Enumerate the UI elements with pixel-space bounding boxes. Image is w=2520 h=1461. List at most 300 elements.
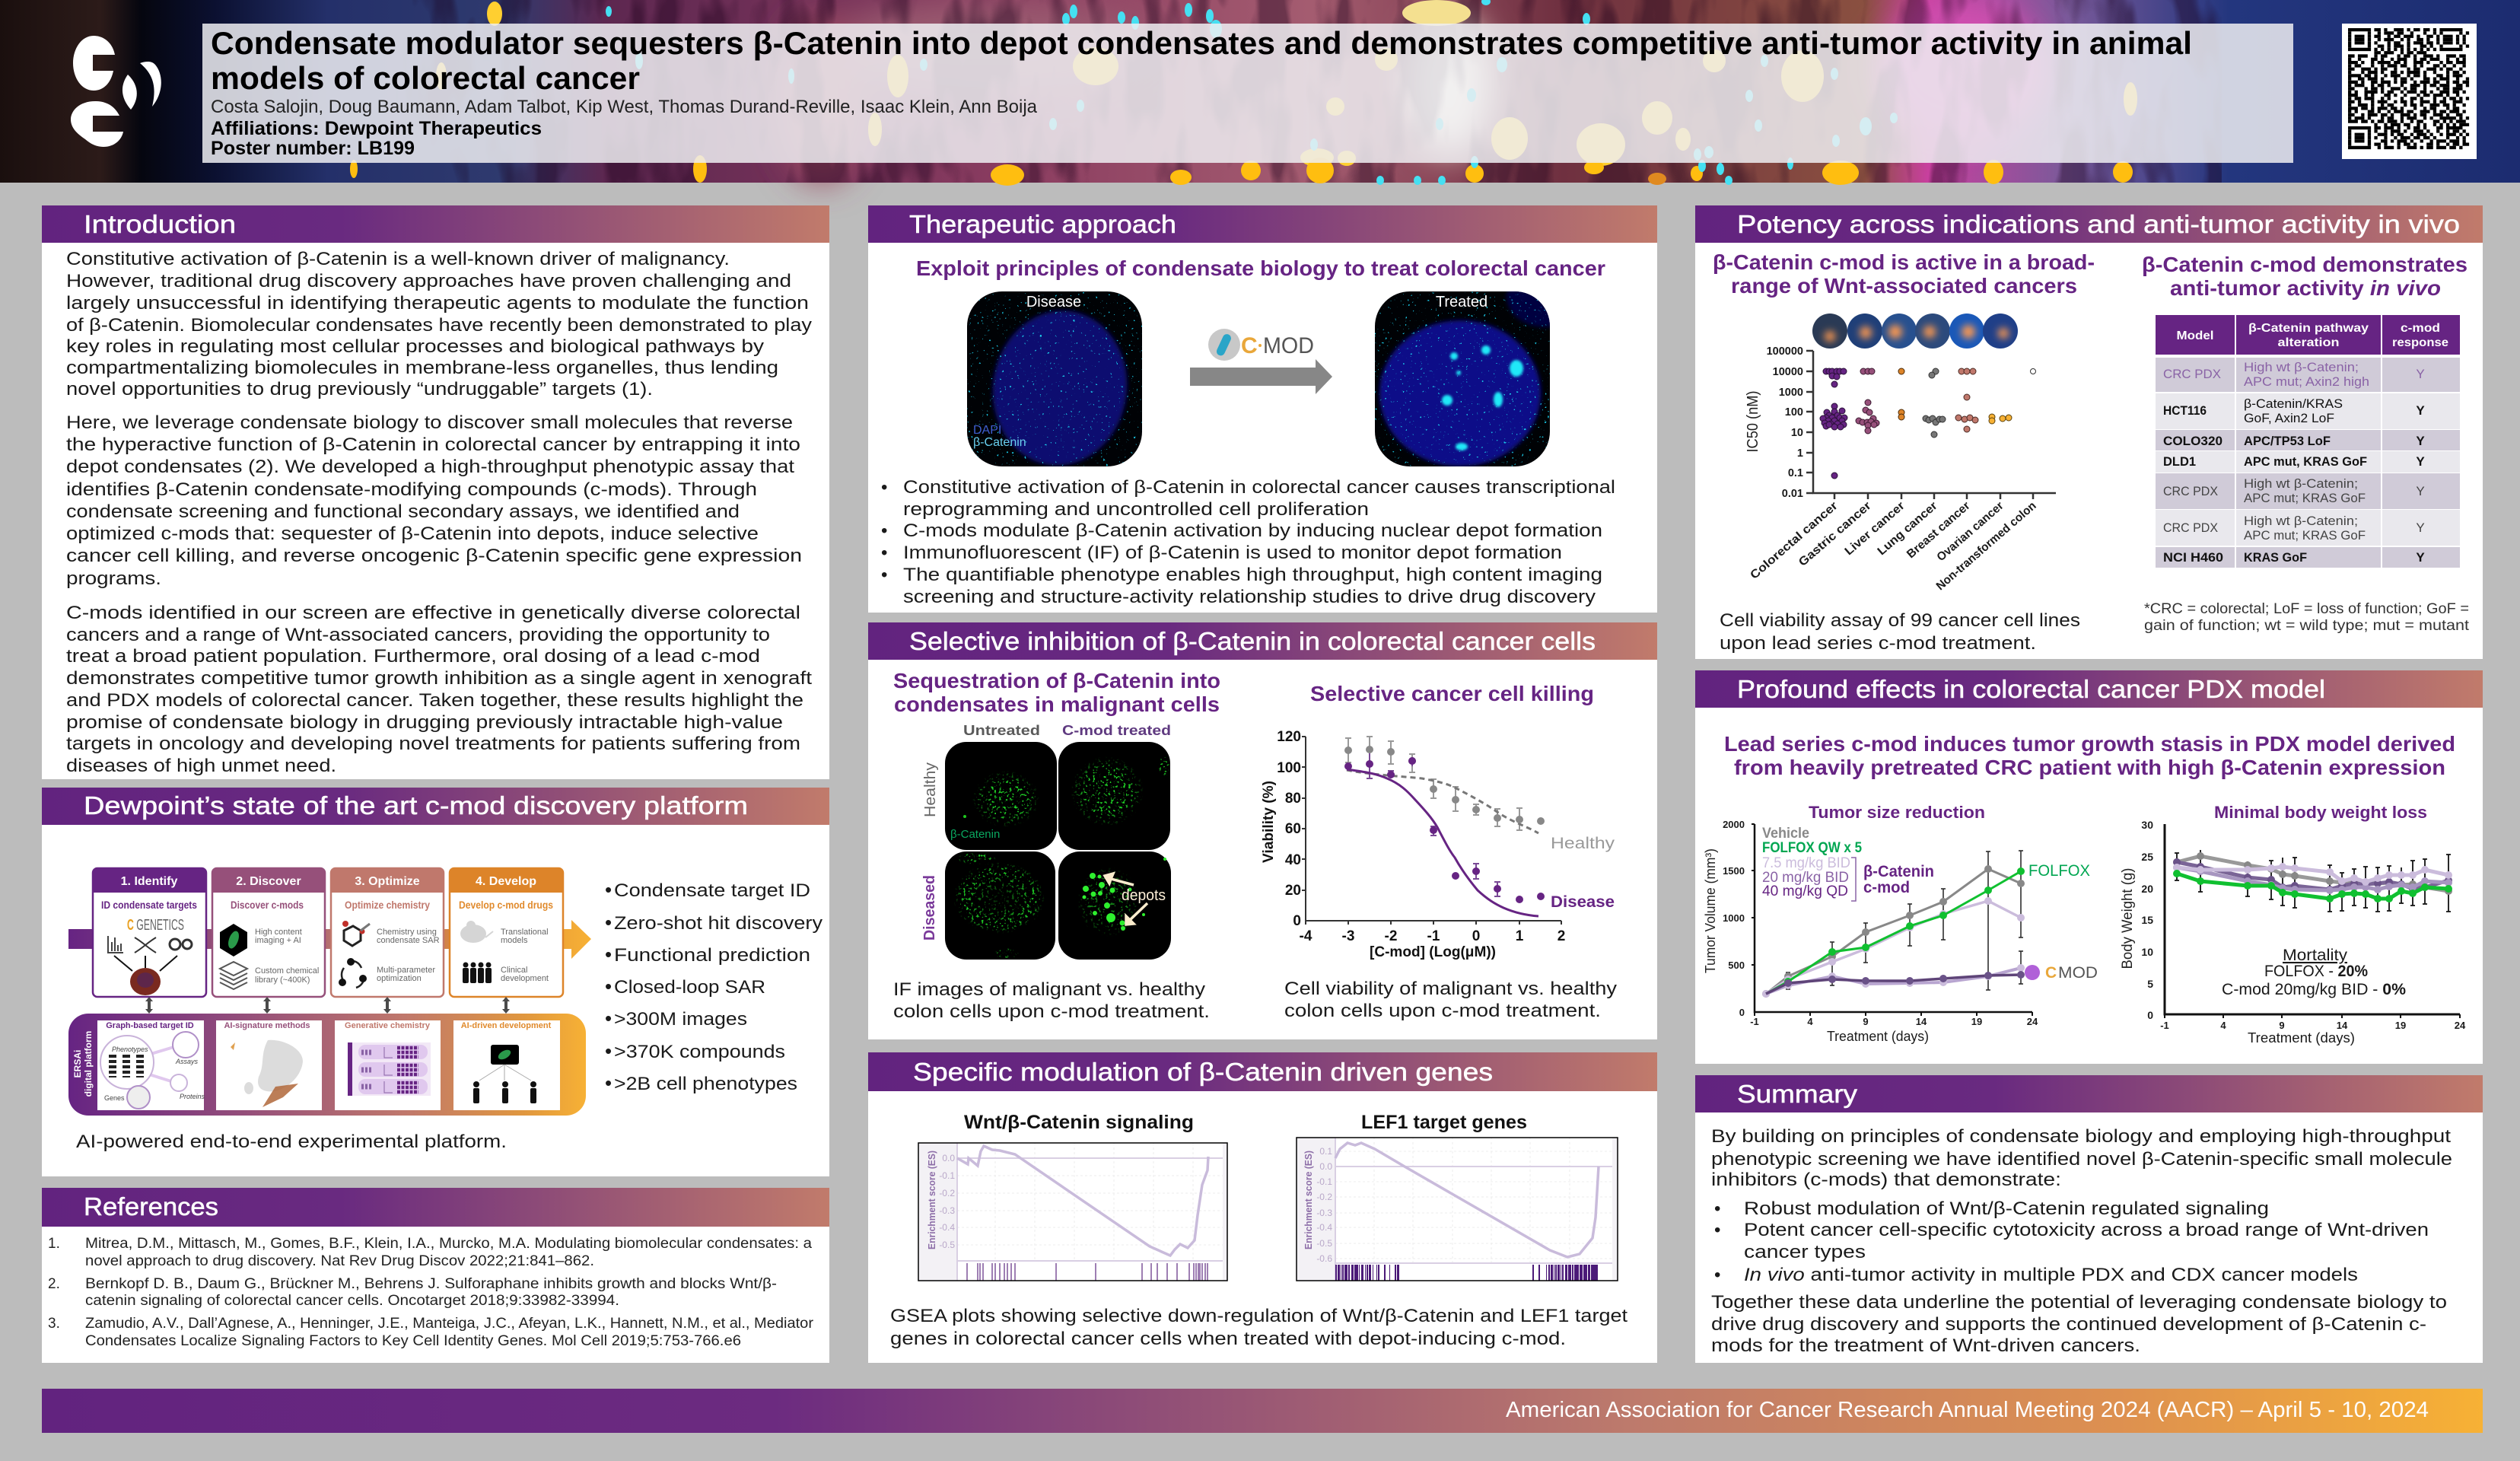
panel: summary xyxy=(1695,1075,2483,1363)
text block: introduction paragraph 3: cancers and a range of Wnt-associated cancers, providing the opportunity to xyxy=(66,625,770,645)
caption: dot plot: Cell viability assay of 99 cancer cell lines xyxy=(1720,610,2080,631)
chart: IC50 dot plot: 0.01 xyxy=(1782,488,1803,500)
chart: IC50 dot plot: Ovarian cancer xyxy=(1934,499,2006,564)
subheading: PDX model xyxy=(1724,732,2455,779)
image: disease nucleus: Disease xyxy=(1026,294,1081,310)
chart: tumor volume: 0 xyxy=(1739,1007,1745,1018)
chart: tumor volume: 9 xyxy=(1863,1016,1869,1027)
chart: body weight: 0 xyxy=(2147,1009,2153,1021)
label: FOLFOX: FOLFOX xyxy=(2028,862,2090,880)
bullet list: therapeutic approach: Immunofluorescent (IF) of β-Catenin is used to monitor depot formation xyxy=(903,543,1562,563)
QR code xyxy=(2342,24,2477,159)
text block: introduction paragraph 3: C-mods identified in our screen are effective in genetically diverse colorectal xyxy=(66,603,800,623)
bullet list: therapeutic approach: Constitutive activation of β-Catenin in colorectal cancer causes transcriptional xyxy=(903,477,1615,498)
subheading: therapeutic approach: Exploit principles of condensate biology to treat colorectal cancer xyxy=(916,256,1605,280)
workflow step 2: discover: library (~400K) xyxy=(255,976,310,985)
bullet list: summary xyxy=(1714,1198,2429,1285)
bullet list: therapeutic approach: reprogramming and uncontrolled cell proliferation xyxy=(903,499,1369,520)
ERSAi digital platform band: ERSAi xyxy=(72,1050,83,1077)
subheading: PDX model: Lead series c-mod induces tumor growth stasis in PDX model derived xyxy=(1724,732,2455,756)
arrow: workflow band xyxy=(68,920,591,959)
chart: GSEA LEF1: -0.5 xyxy=(1316,1238,1332,1249)
reference list: Condensates Localize Signaling Factors to Key Cell Identity Genes. Mol Cell 2019;5:753-766.e6 xyxy=(85,1333,741,1349)
text block: introduction paragraph 3: targets in oncology and developing novel treatments for patients suffering from xyxy=(66,734,800,754)
chart: GSEA Wnt: -0.1 xyxy=(939,1170,955,1181)
reference list: Bernkopf D. B., Daum G., Brückner M., Behrens J. Sulforaphane inhibits growth and blocks Wnt/β- xyxy=(85,1276,777,1292)
heading: references: References xyxy=(84,1192,218,1221)
caption: GSEA xyxy=(890,1306,1628,1349)
subheading: sequestration: Sequestration of β-Catenin into xyxy=(893,669,1220,692)
subheading: in vivo xyxy=(2142,253,2468,300)
subheading: broad range: β-Catenin c-mod is active in a broad- xyxy=(1713,250,2095,274)
workflow step 2: discover: High content xyxy=(255,928,302,937)
authors: Costa Salojin, Doug Baumann, Adam Talbot, Kip West, Thomas Durand-Reville, Isaac Klein, Ann Boija xyxy=(211,97,1038,117)
chart: tumor volume: 2000 xyxy=(1723,819,1745,830)
banner texture xyxy=(396,0,2222,183)
text block: introduction paragraph 3: promise of condensate biology in drugging previously intractable high-value xyxy=(66,712,783,733)
table header: alteration xyxy=(2278,336,2339,349)
chart: IC50 dot plot: 100000 xyxy=(1767,345,1803,358)
chart: viability: 0 xyxy=(1293,913,1301,929)
platform bullet list: • xyxy=(605,1039,612,1062)
chart: GSEA LEF1: -0.1 xyxy=(1316,1176,1332,1187)
table: models xyxy=(2156,315,2460,568)
label: c-mod xyxy=(2025,964,2098,982)
graph-based target ID card: Phenotypes xyxy=(112,1046,148,1053)
chart: viability: 0 xyxy=(1472,928,1480,944)
table rows: GoF, Axin2 LoF xyxy=(2244,411,2334,425)
table rows xyxy=(2156,358,2460,568)
text block: summary intro: phenotypic screening we have identified novel β-Catenin-specific small molecule xyxy=(1711,1149,2452,1170)
text block: introduction paragraph 3: diseases of high unmet need. xyxy=(66,756,336,776)
chart: viability: 100 xyxy=(1277,760,1301,776)
chart: viability: -2 xyxy=(1385,928,1397,944)
chart: body weight: 5 xyxy=(2147,978,2153,990)
table rows: APC mut; KRAS GoF xyxy=(2244,491,2366,505)
workflow step 3: optimize: Chemistry using xyxy=(377,928,437,937)
heading: introduction: Introduction xyxy=(84,210,236,238)
chart: IC50 dot plot: 1 xyxy=(1797,447,1803,460)
banner glow xyxy=(776,0,2047,183)
chart: GSEA LEF1: 0.0 xyxy=(1319,1161,1332,1172)
banner bright spots xyxy=(436,0,2137,167)
table rows: Y xyxy=(2416,403,2425,418)
workflow step 3: optimize xyxy=(331,868,444,997)
chart: GSEA LEF1 xyxy=(1297,1138,1618,1281)
text block: introduction paragraph 2: programs. xyxy=(66,568,161,589)
text block: introduction paragraph 1: key roles in regulating most cellular processes and biological pathways by xyxy=(66,336,764,357)
chart: tumor volume: 14 xyxy=(1916,1016,1927,1027)
workflow step 4: develop: 4. Develop xyxy=(476,875,536,888)
chart legend: Vehicle xyxy=(1762,826,1809,842)
table rows: CRC PDX xyxy=(2163,484,2218,498)
caption: GSEA: GSEA plots showing selective down-regulation of Wnt/β-Catenin and LEF1 target xyxy=(890,1306,1628,1326)
image: disease nucleus: DAPI xyxy=(973,424,1001,437)
micrograph: healthy treated xyxy=(1058,742,1170,850)
mortality note xyxy=(2222,947,2406,998)
chart: IC50 dot plot: 10 xyxy=(1791,427,1803,439)
workflow step 2: discover: Custom chemical xyxy=(255,966,319,976)
table header xyxy=(2156,315,2460,355)
table rows: High wt β-Catenin; xyxy=(2244,476,2358,491)
reference list: Mitrea, D.M., Mittasch, M., Gomes, B.F., Klein, I.A., Murcko, M.A. Modulating biomolecular condensates: a xyxy=(85,1236,812,1252)
workflow step 2: discover: 2. Discover xyxy=(236,875,301,888)
heading: potency: Potency across indications and anti-tumor activity in vivo xyxy=(1737,210,2460,238)
platform bullet list: >370K compounds xyxy=(614,1042,785,1062)
chart: viability: 60 xyxy=(1285,821,1301,837)
subheading: in vivo: anti-tumor activity in vivo xyxy=(2170,276,2441,300)
subheading: PDX model: from heavily pretreated CRC patient with high β-Catenin expression xyxy=(1734,756,2445,779)
chart: IC50 dot plot: 10000 xyxy=(1773,366,1803,378)
chart: tumor volume: 500 xyxy=(1728,960,1745,971)
table rows: Y xyxy=(2416,520,2425,535)
table rows: Y xyxy=(2416,550,2425,565)
chart: tumor volume: 1000 xyxy=(1723,912,1745,924)
text block: introduction paragraph 3: and PDX models of colorectal cancer. Taken together, these results highlight the xyxy=(66,690,803,711)
chart: body weight: Body Weight (g) xyxy=(2120,867,2136,969)
label: depots: depots xyxy=(1122,887,1166,904)
workflow step 2: discover: Discover c-mods xyxy=(231,899,304,911)
chart: body weight: 15 xyxy=(2141,914,2153,926)
chart: viability: 2 xyxy=(1558,928,1565,944)
table header: β-Catenin pathway xyxy=(2248,322,2369,335)
workflow step 4: develop: Clinical xyxy=(501,966,527,975)
graph-based target ID card: Proteins xyxy=(180,1093,205,1100)
arrow: depot 2 xyxy=(1126,903,1147,925)
icons: organ images xyxy=(1812,314,2018,349)
chart: GSEA Wnt: Enrichment score (ES) xyxy=(926,1151,937,1249)
caption: viability xyxy=(1284,979,1617,1021)
chart: GSEA LEF1: -0.3 xyxy=(1316,1208,1332,1218)
table rows: APC mut; Axin2 high xyxy=(2244,374,2369,389)
bullet list: therapeutic approach: • xyxy=(881,520,887,541)
text block: introduction paragraph 2 xyxy=(66,412,802,589)
generative chemistry card xyxy=(335,1020,441,1110)
chart: viability: Healthy xyxy=(1551,835,1615,852)
chart: IC50 dot plot: Lung cancer xyxy=(1876,499,1940,558)
table footnote xyxy=(2144,601,2470,634)
bullet list: therapeutic approach: The quantifiable phenotype enables high throughput, high content imaging xyxy=(903,565,1602,585)
micrograph labels: C-mod treated xyxy=(1062,723,1171,738)
bullet list: summary: • xyxy=(1714,1220,1720,1240)
text block: introduction paragraph 2: cancer cell killing, and reverse oncogenic β-Catenin specific gene expression xyxy=(66,546,802,566)
icon: c-mod logo xyxy=(1208,329,1314,361)
caption: micrographs: IF images of malignant vs. healthy xyxy=(893,979,1205,1000)
caption: dot plot xyxy=(1720,610,2080,654)
chart: GSEA Wnt: -0.2 xyxy=(939,1188,955,1198)
chart: GSEA Wnt: -0.3 xyxy=(939,1205,955,1216)
chart: IC50 dot plot: Breast cancer xyxy=(1904,499,1973,561)
heading: summary: Summary xyxy=(1737,1080,1858,1108)
chart: body weight: 9 xyxy=(2279,1020,2285,1031)
workflow step 4: develop: development xyxy=(501,974,549,983)
table footnote: gain of function; wt = wild type; mut = mutant xyxy=(2144,618,2470,634)
bullet list: therapeutic approach xyxy=(881,477,1615,607)
text block: introduction paragraph 1: However, traditional drug discovery approaches have proven challenging and xyxy=(66,271,791,291)
table rows: KRAS GoF xyxy=(2244,550,2307,565)
icon: c-mod logo: MOD xyxy=(1263,333,1314,358)
micrograph: diseased treated with depots xyxy=(1058,851,1171,960)
workflow step 4: develop xyxy=(450,868,563,997)
caption: viability: colon cells upon c-mod treatment. xyxy=(1284,1001,1601,1021)
workflow step 3: optimize: 3. Optimize xyxy=(355,875,420,888)
text block: introduction paragraph 2: Here, we leverage condensate biology to discover small molecules that reverse xyxy=(66,412,793,433)
workflow step 4: develop: models xyxy=(501,936,528,945)
workflow step 2: discover: imaging + AI xyxy=(255,936,301,945)
platform bullet list: >300M images xyxy=(614,1009,747,1030)
micrograph: healthy untreated: β-Catenin xyxy=(950,828,1000,841)
panel: references xyxy=(42,1188,829,1363)
table rows: CRC PDX xyxy=(2163,520,2218,535)
text block: introduction paragraph 2: condensate screening and functional secondary assays, we identified and xyxy=(66,501,740,522)
text block: introduction paragraph 2: identifies β-Catenin condensate-modifying compounds (c-mods). Through xyxy=(66,479,757,500)
chart legend: 7.5 mg/kg BID xyxy=(1762,855,1850,871)
table rows: β-Catenin/KRAS xyxy=(2244,396,2343,411)
platform bullet list: • xyxy=(605,1071,612,1094)
table rows: Y xyxy=(2416,434,2425,448)
bullet list: therapeutic approach: screening and structure-activity relationship studies to drive drug discovery xyxy=(903,587,1596,607)
chart: GSEA Wnt: 0.0 xyxy=(942,1153,955,1163)
arrows: workflow to platform xyxy=(145,997,510,1014)
chart: viability: Disease xyxy=(1551,893,1615,911)
chart: IC50 dot plot: Non-transformed colon xyxy=(1934,499,2039,593)
chart: GSEA Wnt xyxy=(918,1143,1227,1281)
micrograph labels: Untreated xyxy=(963,723,1040,738)
table header: Model xyxy=(2176,329,2214,342)
micrograph: diseased untreated xyxy=(945,851,1055,960)
subheading: broad range: range of Wnt-associated cancers xyxy=(1731,274,2077,298)
chart: tumor volume: 19 xyxy=(1971,1016,1982,1027)
subheading: sequestration: condensates in malignant cells xyxy=(894,692,1220,716)
table rows: COLO320 xyxy=(2163,434,2222,448)
table header: c-mod xyxy=(2401,322,2440,335)
text block: summary intro: By building on principles of condensate biology and employing high-throughput xyxy=(1711,1126,2451,1147)
chart: IC50 dot plot xyxy=(1745,345,2056,593)
caption: GSEA: genes in colorectal cancer cells when treated with depot-inducing c-mod. xyxy=(890,1329,1566,1349)
chart: viability: -3 xyxy=(1342,928,1354,944)
bullet list: therapeutic approach: • xyxy=(881,477,887,498)
platform bullet list: • xyxy=(605,911,612,934)
chart legend: c-mod xyxy=(1863,879,1910,896)
table rows: Y xyxy=(2416,454,2425,469)
panel: discovery platform xyxy=(42,788,829,1176)
chart: tumor volume xyxy=(1703,819,2098,1044)
mortality note: FOLFOX - 20% xyxy=(2264,963,2368,980)
label: c-mod: C xyxy=(2045,964,2057,982)
image: disease nucleus xyxy=(967,291,1142,474)
platform bullet list: Closed-loop SAR xyxy=(614,977,765,998)
platform bullet list: • xyxy=(605,1007,612,1030)
heading: therapeutic approach: Therapeutic approach xyxy=(909,210,1176,238)
chart: GSEA Wnt: -0.4 xyxy=(939,1222,955,1233)
chart: IC50 dot plot: Liver cancer xyxy=(1843,499,1908,558)
table rows: APC mut; KRAS GoF xyxy=(2244,528,2366,543)
chart: viability: 20 xyxy=(1285,883,1301,899)
ERSAi digital platform band: digital platform xyxy=(83,1031,94,1097)
chart: GSEA LEF1: 0.1 xyxy=(1319,1146,1332,1157)
heading: gene modulation: Specific modulation of β-Catenin driven genes xyxy=(913,1058,1493,1086)
chart: GSEA LEF1: -0.2 xyxy=(1316,1192,1332,1202)
chart legend: β-Catenin xyxy=(1863,863,1934,880)
chart: viability: 120 xyxy=(1277,729,1301,745)
chart: tumor volume: 24 xyxy=(2027,1016,2038,1027)
text block: introduction paragraph 1 xyxy=(66,249,812,399)
chart: body weight xyxy=(2120,819,2466,1046)
workflow step 1: identify: C GENETICS xyxy=(127,917,184,934)
caption: dot plot: upon lead series c-mod treatment. xyxy=(1720,633,2036,654)
platform bullet list: • xyxy=(605,975,612,998)
chart: tumor volume: -1 xyxy=(1750,1016,1759,1027)
chart: GSEA Wnt: -0.5 xyxy=(939,1240,955,1250)
micrograph labels: Healthy xyxy=(922,762,939,817)
image: disease nucleus: β-Catenin xyxy=(973,436,1026,449)
text block: introduction paragraph 3: demonstrates competitive tumor growth inhibition as a single agent in xenograft xyxy=(66,668,812,689)
workflow step 3: optimize: Multi-parameter xyxy=(377,966,435,975)
bullet list: summary: • xyxy=(1714,1265,1720,1285)
chart legend xyxy=(1762,826,1934,901)
panel: potency xyxy=(1695,205,2483,659)
text block: introduction paragraph 2: optimized c-mods that: sequester of β-Catenin into depots, induce selective xyxy=(66,524,759,544)
image: treated nucleus xyxy=(1375,291,1550,466)
chart: body weight: 20 xyxy=(2141,883,2153,895)
graph-based target ID card: Assays xyxy=(175,1058,199,1065)
text block: introduction paragraph 1: compartmentalizing biomolecules in membrane-less organelles, thus lending xyxy=(66,358,778,378)
arrow: depot 1 xyxy=(1105,874,1134,885)
chart: viability: 80 xyxy=(1285,791,1301,807)
chart: body weight: Treatment (days) xyxy=(2248,1030,2355,1046)
workflow step 1: identify: 1. Identify xyxy=(121,875,177,888)
chart: body weight: 30 xyxy=(2141,819,2153,831)
chart title: body weight: Minimal body weight loss xyxy=(2214,803,2427,822)
chart: body weight: 25 xyxy=(2141,851,2153,863)
footer band xyxy=(42,1389,2483,1433)
text block: summary conclusion: drive drug discovery and supports the continued development of β-Catenin c- xyxy=(1711,1314,2426,1335)
table rows: APC mut, KRAS GoF xyxy=(2244,454,2367,469)
chart: viability: Viability (%) xyxy=(1261,781,1277,863)
chart: IC50 dot plot: 0.1 xyxy=(1788,467,1803,479)
caption: micrographs: colon cells upon c-mod treatment. xyxy=(893,1001,1210,1022)
title block xyxy=(202,24,2293,163)
workflow step 1: identify xyxy=(93,868,206,997)
table rows: High wt β-Catenin; xyxy=(2244,360,2359,374)
chart: IC50 dot plot: Colorectal cancer xyxy=(1748,499,1841,582)
chart: IC50 dot plot: 1000 xyxy=(1779,387,1803,399)
panel: gene modulation xyxy=(868,1052,1657,1363)
chart title: tumor size: Tumor size reduction xyxy=(1809,803,1985,822)
text block: summary intro: inhibitors (c-mods) that demonstrate: xyxy=(1711,1170,2061,1190)
footer text: American Association for Cancer Research Annual Meeting 2024 (AACR) – April 5 - 10, 2024 xyxy=(1506,1398,2429,1422)
chart: body weight: 19 xyxy=(2395,1020,2406,1031)
platform bullet list: Functional prediction xyxy=(614,945,810,966)
panel: selective inhibition xyxy=(868,622,1657,1039)
bullet list: summary: In vivo anti-tumor activity in multiple PDX and CDX cancer models xyxy=(1744,1265,2358,1285)
chart: viability: 1 xyxy=(1516,928,1524,944)
reference list: 1. xyxy=(48,1236,60,1252)
table rows: APC/TP53 LoF xyxy=(2244,434,2331,448)
mortality note: Mortality xyxy=(2283,947,2348,964)
table rows: High wt β-Catenin; xyxy=(2244,514,2358,528)
text block: introduction paragraph 3 xyxy=(66,603,812,776)
chart: body weight: 10 xyxy=(2141,946,2153,958)
ERSAi digital platform band xyxy=(68,1014,586,1116)
header banner xyxy=(0,0,2520,186)
chart: IC50 dot plot: Gastric cancer xyxy=(1796,499,1874,569)
bullet list: summary: • xyxy=(1714,1198,1720,1219)
bullet list: therapeutic approach: • xyxy=(881,565,887,585)
panel: therapeutic approach xyxy=(868,205,1657,613)
chart: body weight: -1 xyxy=(2160,1020,2169,1031)
chart: viability: -1 xyxy=(1427,928,1440,944)
chart: GSEA LEF1: Enrichment score (ES) xyxy=(1303,1151,1314,1249)
platform bullet list xyxy=(605,878,822,1094)
chart: viability: 40 xyxy=(1285,852,1301,868)
chart: tumor volume: Tumor Volume (mm³) xyxy=(1703,848,1718,973)
table header: response xyxy=(2392,336,2448,349)
text block: summary conclusion: Together these data underline the potential of leveraging condensate biology to xyxy=(1711,1292,2447,1313)
platform bullet list: • xyxy=(605,878,612,901)
bullet list: therapeutic approach: • xyxy=(881,543,887,563)
chart legend: FOLFOX QW x 5 xyxy=(1762,840,1862,856)
affiliations: Affiliations: Dewpoint Therapeutics xyxy=(211,118,542,139)
poster number: Poster number: LB199 xyxy=(211,138,415,159)
chart: viability: [C-mod] (Log(μM)) xyxy=(1370,944,1496,960)
chart: GSEA LEF1: -0.4 xyxy=(1316,1222,1332,1233)
workflow step 1: identify: ID condensate targets xyxy=(101,899,197,911)
bullet list: therapeutic approach: C-mods modulate β-Catenin activation by inducing nuclear depot formation xyxy=(903,520,1602,541)
text block: introduction paragraph 1: Constitutive activation of β-Catenin is a well-known driver of malignancy. xyxy=(66,249,730,269)
AI-driven development card xyxy=(453,1020,560,1110)
platform bullet list: Zero-shot hit discovery xyxy=(614,913,822,934)
platform bullet list: >2B cell phenotypes xyxy=(614,1074,797,1094)
heading: selective inhibition: Selective inhibition of β-Catenin in colorectal cancer cells xyxy=(909,627,1596,655)
workflow step 3: optimize: optimization xyxy=(377,974,422,983)
bullet list: summary: Potent cancer cell-specific cytotoxicity across a broad range of Wnt-driven xyxy=(1744,1220,2429,1240)
banner cyan spots xyxy=(606,0,1898,185)
table rows: Y xyxy=(2416,367,2425,381)
AI-driven development card: AI-driven development xyxy=(461,1021,552,1030)
reference list: 3. xyxy=(48,1316,60,1332)
chart: viability xyxy=(1261,729,1615,960)
chart: IC50 dot plot: IC50 (nM) xyxy=(1745,391,1761,452)
subheading: selective killing: Selective cancer cell killing xyxy=(1310,682,1594,705)
reference list: catenin signaling of colorectal cancer cells. Oncotarget 2018;9:33982-33994. xyxy=(85,1293,619,1309)
workflow step 2: discover xyxy=(212,868,325,997)
chart: body weight: 24 xyxy=(2455,1020,2466,1031)
workflow step 3: optimize: condensate SAR xyxy=(377,936,440,945)
generative chemistry card: Generative chemistry xyxy=(345,1021,431,1030)
chart: viability: -4 xyxy=(1300,928,1312,944)
chart title: Wnt: Wnt/β-Catenin signaling xyxy=(964,1112,1194,1133)
panel: introduction xyxy=(42,205,829,779)
subheading: broad range xyxy=(1713,250,2095,298)
icon: c-mod logo: C xyxy=(1241,333,1258,358)
platform bullet list: • xyxy=(605,943,612,966)
table rows: Y xyxy=(2416,484,2425,498)
chart: IC50 dot plot: 100 xyxy=(1785,406,1803,419)
arrow: treatment xyxy=(1190,359,1332,394)
chart legend: 20 mg/kg BID xyxy=(1762,870,1849,886)
reference list: Zamudio, A.V., Dall’Agnese, A., Henninger, J.E., Manteiga, J.C., Afeyan, L.K., Hannett, N.M., et al., Mediator xyxy=(85,1316,814,1332)
micrograph: healthy untreated xyxy=(945,742,1057,850)
workflow step 3: optimize: Optimize chemistry xyxy=(345,899,430,911)
chart title: LEF1: LEF1 target genes xyxy=(1361,1112,1527,1133)
micrograph labels: Diseased xyxy=(921,875,938,941)
panel: PDX model xyxy=(1695,670,2483,1064)
heading: discovery platform: Dewpoint’s state of the art c-mod discovery platform xyxy=(84,791,748,820)
graph-based target ID card: Genes xyxy=(104,1094,125,1102)
chart: body weight: 4 xyxy=(2220,1020,2226,1031)
text block: summary conclusion xyxy=(1711,1292,2447,1356)
